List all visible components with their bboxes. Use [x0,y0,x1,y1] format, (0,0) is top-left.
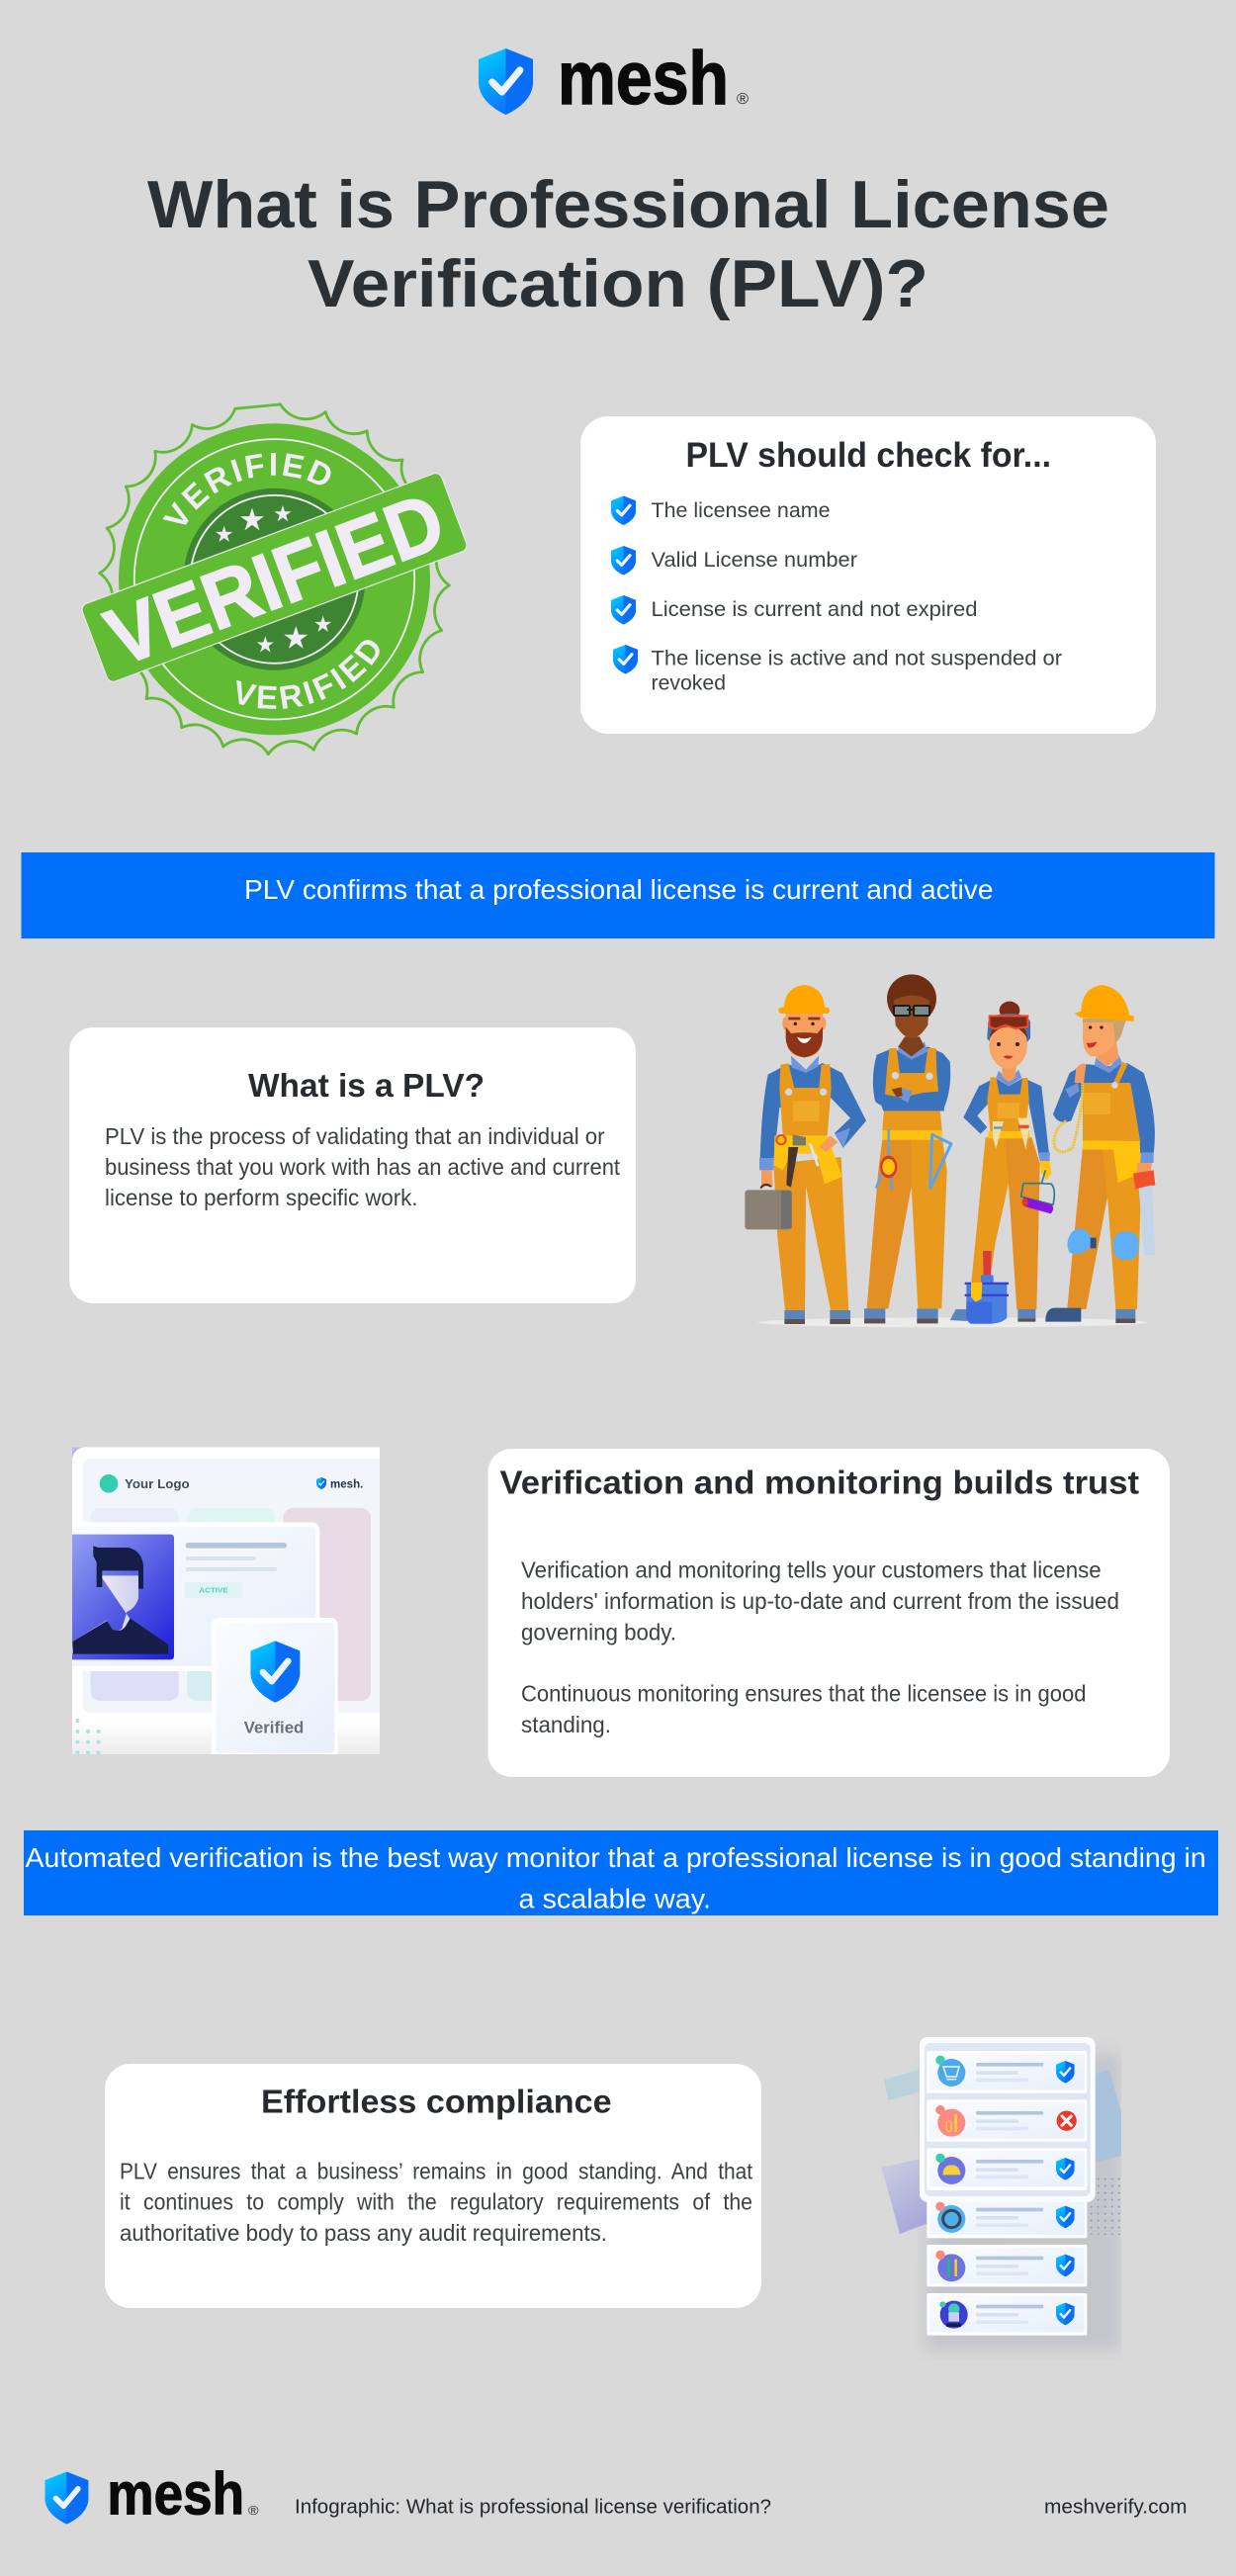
row 2 [927,2099,1087,2142]
text block: Continuous monitoring ensures that the licensee is in good [521,1681,1086,1707]
list item: active [613,645,1062,694]
profile photo [72,1535,174,1659]
footer logo: ® [248,2503,259,2518]
icon: verified badge [81,403,467,755]
panel: What is a PLV [69,1027,636,1303]
active pill [185,1582,242,1598]
icon: mesh shield [479,48,533,115]
logo placeholder [100,1474,190,1493]
list item: current: License is current and not expired [651,598,977,621]
logo placeholder: Your Logo [125,1476,190,1491]
list item: license number [611,546,857,576]
panel: PLV should check for [580,416,1156,734]
panel: top checklist card [920,2037,1096,2202]
text block: it continues to comply with the regulatory requirements of the [120,2189,752,2215]
text block: business that you work with has an active and current [105,1154,621,1180]
verified card: Verified [244,1719,304,1737]
banner: automated verification: Automated verification is the best way monitor that a professional license is in good standing in [26,1842,1206,1873]
list item: current [611,595,977,625]
banner: PLV confirms: PLV confirms that a professional license is current and active [244,874,993,905]
row 6 [927,2293,1087,2336]
list item: licensee name: The licensee name [651,499,831,522]
icon: verified badge: VERIFIED [162,453,331,525]
worker 3 [950,1002,1054,1324]
list item: licensee name [611,496,831,525]
verified card [212,1618,338,1763]
text block: holders' information is up-to-date and current from the issued [521,1588,1119,1614]
text block: standing. [521,1712,611,1737]
heading: Verification and monitoring builds trust [500,1464,1139,1501]
mini mesh logo: mesh. [330,1476,363,1490]
registered mark: ® [737,91,749,108]
banner: automated verification: a scalable way. [518,1883,711,1913]
footer [44,2460,1187,2527]
text block [521,1557,1119,1737]
title: Verification (PLV)? [308,246,928,321]
panel: Verification and monitoring [488,1449,1170,1777]
logo: mesh header [479,37,749,121]
row 4 [927,2201,1088,2239]
text block: PLV ensures that a business’ remains in good standing. And that [120,2159,753,2184]
row 1 [927,2051,1087,2093]
footer logo: mesh [107,2460,244,2527]
panel: Effortless compliance [105,2064,761,2308]
banner: automated verification [24,1830,1218,1915]
row 5 [927,2245,1087,2286]
illustration: compliance checklist [882,2037,1122,2351]
heading: PLV should check for... [686,436,1051,475]
text block: PLV is the process of validating that an individual or [105,1123,605,1149]
title: What is Professional License [147,167,1109,242]
icon: verified badge: VERIFIED [236,640,380,709]
text block [120,2159,753,2246]
heading: What is a PLV? [248,1067,485,1104]
text block [105,1123,621,1210]
worker 2 [864,974,951,1323]
text block: license to perform specific work. [105,1185,417,1210]
active pill: ACTIVE [199,1586,228,1595]
list item: license number: Valid License number [651,549,857,572]
heading: Effortless compliance [261,2083,612,2119]
illustration: workers [745,974,1155,1327]
worker 1 [745,985,866,1324]
icon: verified badge: VERIFIED [95,476,456,683]
text block: authoritative body to pass any audit requirements. [120,2220,607,2246]
illustration: verified profile mockup [59,1447,389,1763]
worker 4 [1045,985,1155,1323]
logo wordmark: mesh [558,37,729,121]
row 3 [927,2148,1087,2190]
banner: PLV confirms [22,852,1214,938]
text block: Verification and monitoring tells your customers that license [521,1557,1102,1583]
list item: active: The license is active and not suspended or [651,647,1062,670]
footer caption: Infographic: What is professional license verification? [295,2497,771,2519]
profile card [59,1522,319,1671]
text block: governing body. [521,1620,676,1645]
mini mesh logo [316,1477,363,1489]
list item: active: revoked [651,672,726,694]
title [147,167,1109,321]
footer logo [44,2460,259,2527]
footer website: meshverify.com [1044,2497,1187,2519]
